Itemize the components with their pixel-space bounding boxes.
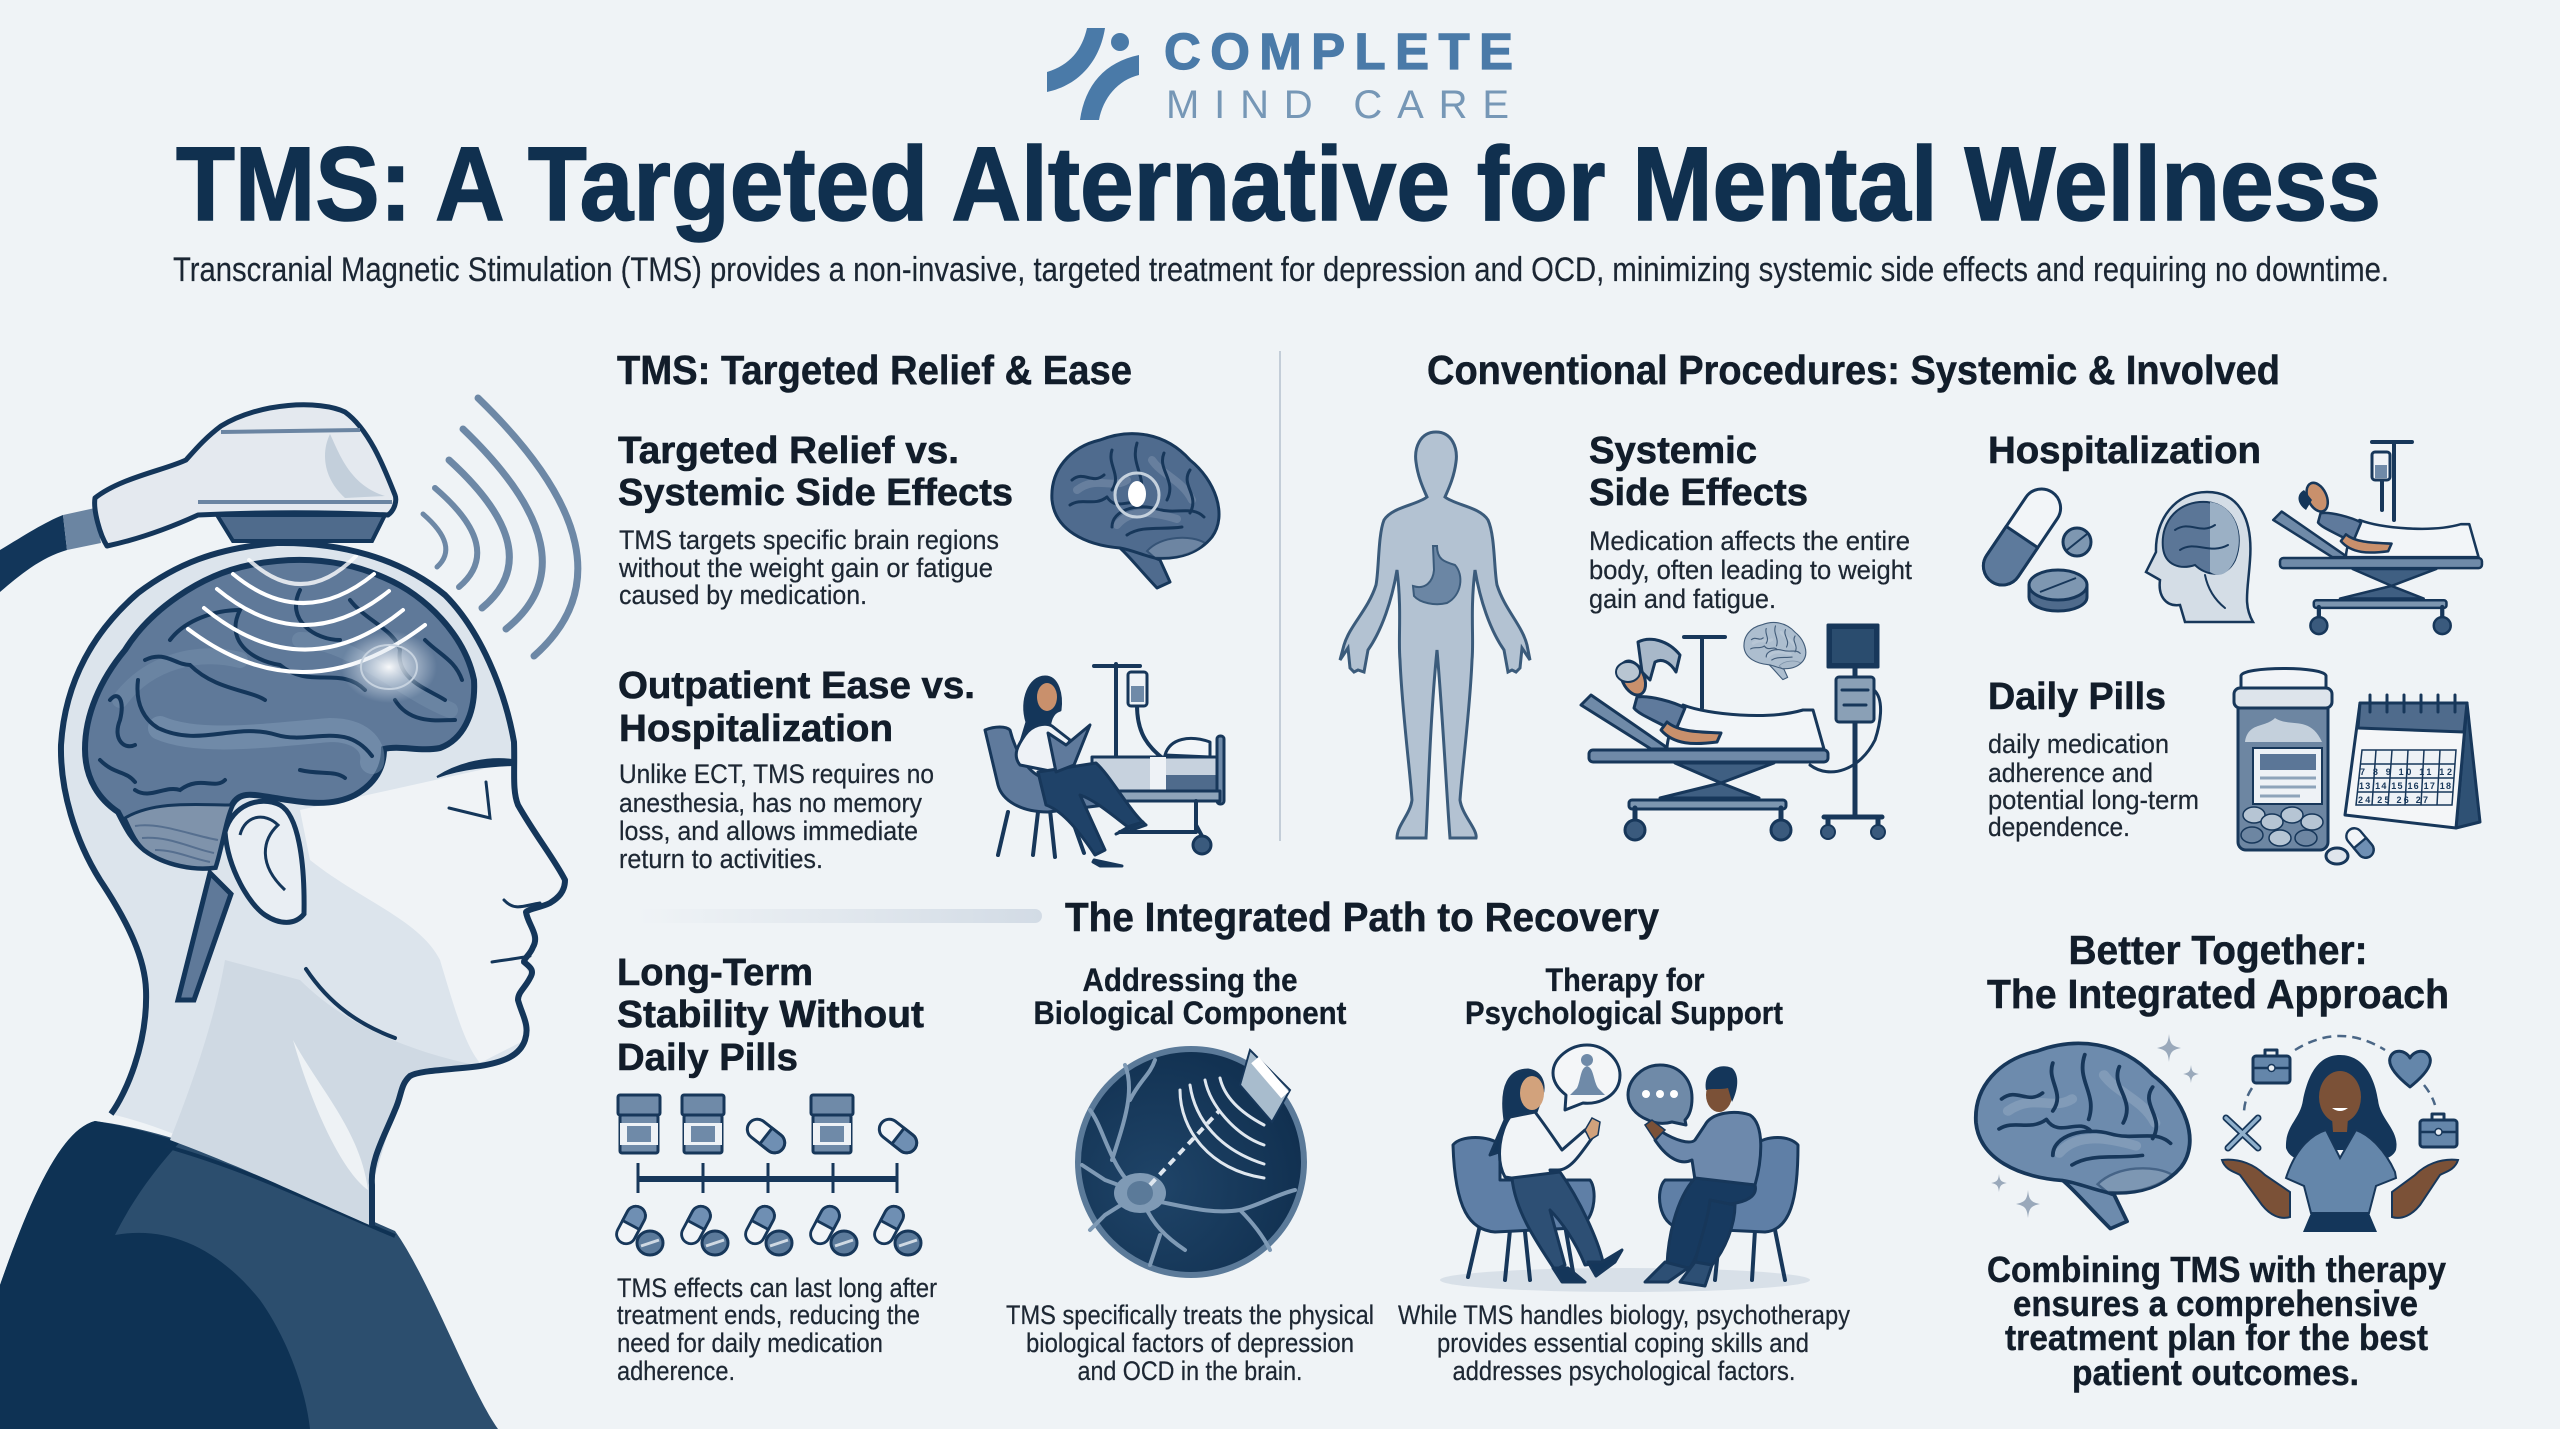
panel: outpatient ease (618, 664, 1224, 874)
section bar: integrated path (637, 909, 1042, 923)
heading line 2: Systemic Side Effects (618, 472, 1013, 514)
body text: addresses psychological factors. (1452, 1356, 1796, 1386)
chair left (1453, 1138, 1594, 1280)
facial features (306, 759, 540, 1038)
speech bubble: meditation (1553, 1045, 1620, 1110)
head outline (61, 543, 565, 1226)
body text: and OCD in the brain. (1078, 1356, 1302, 1386)
heading (617, 952, 924, 1079)
heading: Biological Component (1034, 995, 1347, 1031)
target glow (341, 631, 437, 703)
body text: treatment ends, reducing the (617, 1300, 920, 1330)
icons: bottles and capsules row (618, 1095, 921, 1157)
panel: systemic side effects (1589, 430, 1912, 614)
body text (1006, 1300, 1374, 1386)
heading: Systemic (1589, 430, 1757, 472)
conclusion text: Combining TMS with therapy (1987, 1249, 2446, 1290)
machine (1824, 667, 1882, 828)
heading: Targeted Relief vs. (618, 430, 959, 472)
conclusion text: patient outcomes. (2072, 1352, 2359, 1393)
body text (619, 759, 934, 874)
icon: calendar: 24 25 26 27 (2358, 795, 2428, 805)
icon: pill bottle (2234, 668, 2377, 864)
speech bubble: dots (1628, 1065, 1692, 1125)
illustration: head with TMS coil (0, 398, 578, 1429)
heading: Psychological Support (1465, 995, 1783, 1031)
heading: Long-Term (617, 952, 813, 994)
heading (1465, 962, 1783, 1031)
heading: Daily Pills (1988, 676, 2166, 718)
illustration: patient in bed (2273, 442, 2482, 634)
logo wordmark: COMPLETE (1164, 23, 1513, 80)
body text: While TMS handles biology, psychotherapy (1398, 1300, 1850, 1330)
body text: biological factors of depression (1026, 1328, 1354, 1358)
stomach (1413, 546, 1460, 604)
body text: anesthesia, has no memory (619, 788, 922, 818)
body text: adherence. (617, 1356, 735, 1386)
conclusion text: treatment plan for the best (2005, 1317, 2428, 1358)
icon: calendar: 7 8 9 10 11 12 (2360, 767, 2452, 777)
icon: calendar: 13 14 15 16 17 18 (2359, 781, 2451, 791)
brain (85, 560, 474, 1000)
body text: TMS effects can last long after (617, 1273, 937, 1303)
heading: TMS column: TMS: Targeted Relief & Ease (617, 347, 1132, 393)
body text: without the weight gain or fatigue (618, 553, 993, 583)
monitor (1828, 625, 1878, 667)
heading: Therapy for (1546, 962, 1704, 998)
body text: adherence and (1988, 758, 2153, 788)
body text: gain and fatigue. (1589, 584, 1776, 614)
vertical divider (1279, 351, 1281, 841)
body text: return to activities. (619, 844, 823, 874)
heading line 2: Hospitalization (619, 708, 893, 750)
illustration: woman with icons (2222, 1036, 2458, 1232)
heading: Better Together: (2068, 927, 2368, 973)
body text: potential long-term (1988, 785, 2199, 815)
body text (1398, 1300, 1850, 1386)
body text (618, 525, 999, 610)
heading: Stability Without (617, 994, 924, 1036)
body text (617, 1273, 937, 1386)
heading: Hospitalization (1988, 430, 2261, 472)
heading (1987, 927, 2449, 1017)
dashed arcs (2244, 1036, 2435, 1113)
icon: head with brain (2146, 492, 2253, 622)
head shape (61, 543, 565, 1226)
illustration: human body with stomach (1340, 432, 1530, 838)
panel: better together (1976, 927, 2458, 1393)
body text: dependence. (1988, 812, 2130, 842)
illustration: ECT procedure (1581, 622, 1885, 840)
body text: provides essential coping skills and (1437, 1328, 1809, 1358)
panel: targeted relief (618, 430, 1219, 610)
small brain (1744, 622, 1806, 680)
heading: conventional column: Conventional Procedures: Systemic & Involved (1427, 347, 2280, 393)
chair right (1660, 1138, 1798, 1280)
body text: loss, and allows immediate (619, 816, 918, 846)
face light area (300, 760, 565, 1063)
body text: need for daily medication (617, 1328, 883, 1358)
body text (1589, 526, 1912, 614)
panel: daily pills (1988, 668, 2480, 864)
icons: pill pairs row (613, 1203, 921, 1255)
body text: Unlike ECT, TMS requires no (619, 759, 934, 789)
TMS coil device (0, 405, 396, 592)
panel: hospitalization (1976, 430, 2482, 634)
woman (1490, 1070, 1622, 1282)
body text: body, often leading to weight (1589, 555, 1912, 585)
heading line 2: Side Effects (1589, 472, 1808, 514)
ear (225, 801, 304, 922)
icon: large brain with sparkles (1976, 1034, 2199, 1229)
icon: calendar (2345, 695, 2480, 828)
crossed tools (2226, 1118, 2258, 1148)
logo: Complete Mind Care (1047, 23, 1513, 127)
panel: psychological support (1398, 962, 1850, 1386)
illustration: woman reading beside bed (985, 664, 1224, 866)
body text: TMS specifically treats the physical (1006, 1300, 1374, 1330)
icon: logo mark (1047, 28, 1139, 120)
shirt (0, 1121, 498, 1429)
heading: integrated path: The Integrated Path to Recovery (1065, 894, 1659, 940)
conclusion text: ensures a comprehensive (2013, 1283, 2418, 1324)
logo tagline: MIND CARE (1166, 83, 1509, 127)
panel: long-term stability (613, 952, 937, 1386)
icon: brain with target (1052, 434, 1219, 588)
heading: Daily Pills (617, 1037, 798, 1079)
white stimulation waves (188, 556, 425, 672)
timeline (638, 1163, 897, 1193)
outer wave arcs (423, 398, 578, 656)
panel: biological component (1006, 962, 1374, 1386)
title: TMS: A Targeted Alternative for Mental Wellness (176, 126, 2381, 243)
illustration: therapy session (1440, 1045, 1810, 1292)
heading: The Integrated Approach (1987, 971, 2449, 1017)
heading (1034, 962, 1347, 1031)
heart (2390, 1051, 2430, 1087)
body text: TMS targets specific brain regions (619, 525, 999, 555)
conclusion text (1987, 1249, 2446, 1393)
body text: Medication affects the entire (1589, 526, 1910, 556)
body text: daily medication (1988, 729, 2169, 759)
heading: Addressing the (1082, 962, 1298, 998)
body text: caused by medication. (619, 580, 867, 610)
man (1645, 1066, 1761, 1286)
heading: Outpatient Ease vs. (618, 665, 975, 707)
illustration: neuron circle (1078, 1049, 1304, 1275)
icon: capsule and tablets (1976, 482, 2091, 611)
body text (1988, 729, 2199, 842)
